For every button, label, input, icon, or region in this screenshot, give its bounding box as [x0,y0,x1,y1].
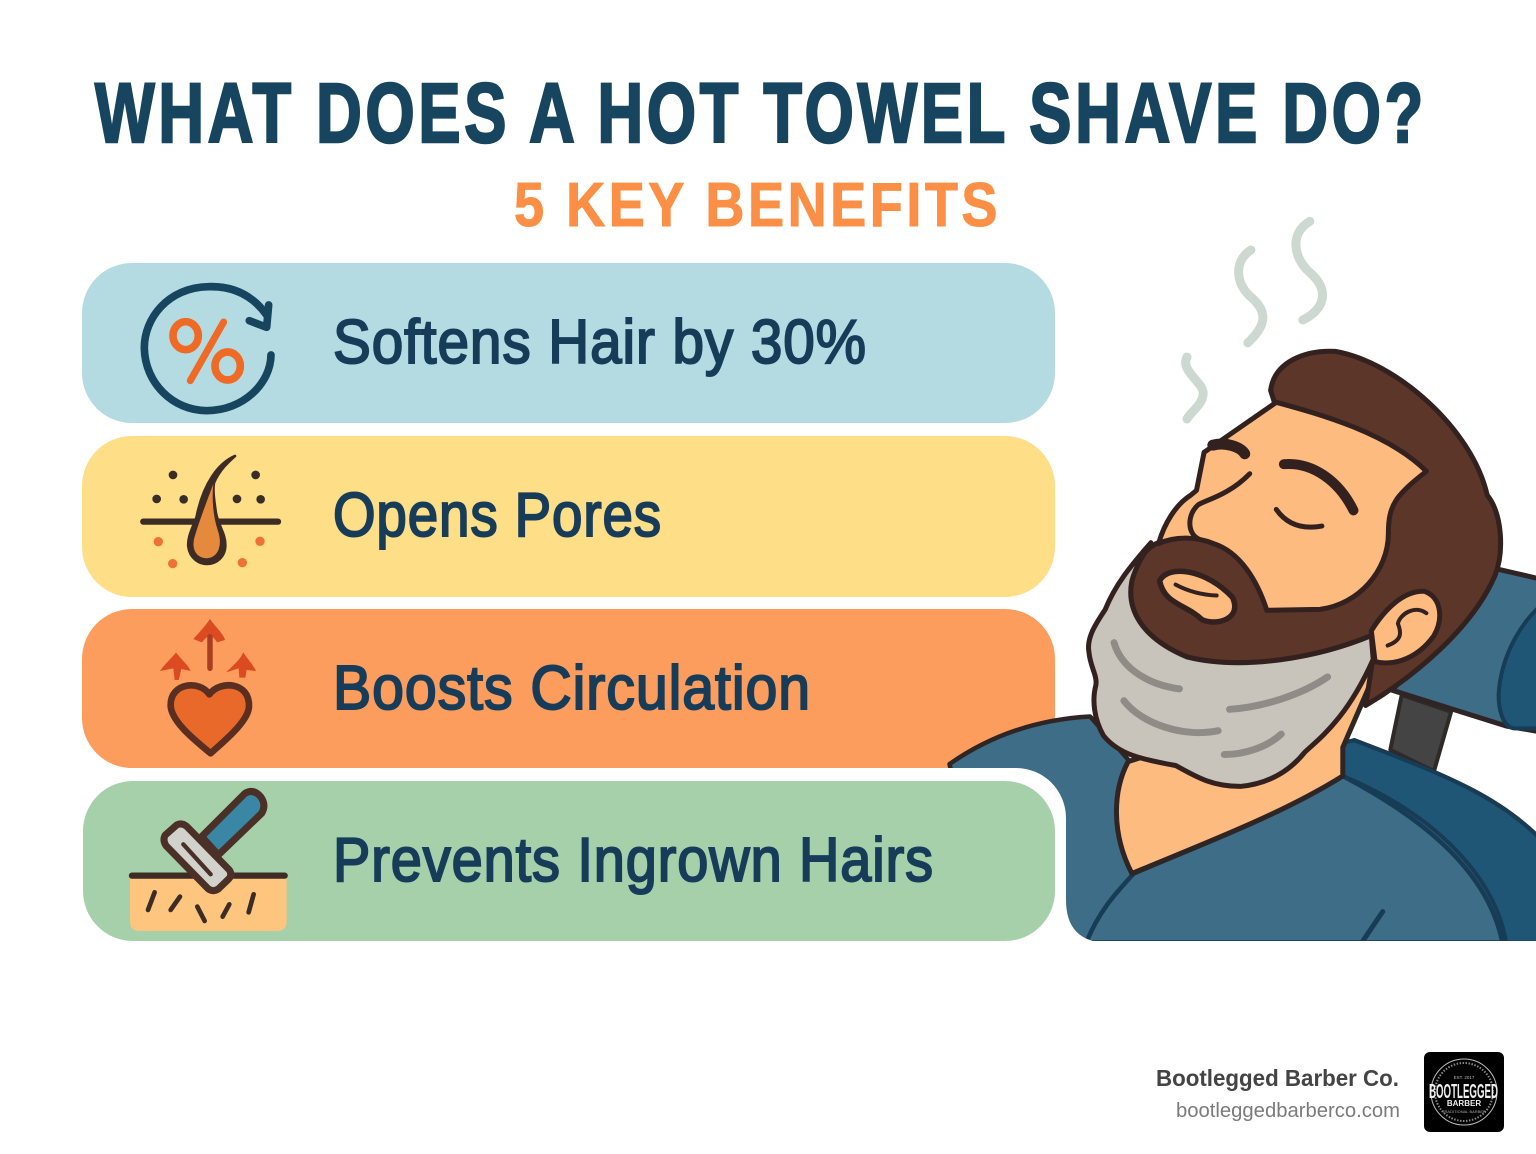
logo: TRADITIONAL BARBER [1442,1109,1486,1114]
label: Prevents Ingrown Hairs [333,826,934,895]
label: Softens Hair by 30% [333,308,867,377]
icon: heart with arrows [160,619,256,753]
icon: razor on skin [130,791,287,931]
footer: brand name: Bootlegged Barber Co. [1156,1065,1399,1091]
eyebrow [1284,464,1353,510]
icon: percent with circular arrow [144,287,271,411]
subtitle: 5 KEY BENEFITS [514,171,1001,240]
logo: BARBER [1447,1099,1481,1108]
ear [1371,591,1440,663]
face [1158,402,1426,610]
steam [1186,221,1323,419]
footer: website: bootleggedbarberco.com [1176,1100,1400,1122]
panel: boosts circulation [82,609,1055,768]
illustration: man relaxing with hot towel [950,221,1536,943]
label: Boosts Circulation [333,654,811,723]
hot towel [1089,543,1373,786]
panel: prevents ingrown hairs [83,781,1055,941]
white cut-out around the last panel [60,768,1066,1008]
lips [1160,571,1235,622]
panel: softens hair [82,263,1055,423]
hair and beard [1131,351,1501,706]
neck [1116,664,1379,874]
icon: hair follicle [143,456,278,568]
shirt [950,716,1536,943]
chair headrest [1390,569,1536,771]
panel: opens pores [82,436,1055,597]
logo [1424,1052,1504,1132]
label: Opens Pores [333,481,662,550]
closed eye [1276,509,1322,527]
logo: EST. 2017 [1454,1075,1475,1080]
brow ridge and nose line [1190,444,1250,539]
